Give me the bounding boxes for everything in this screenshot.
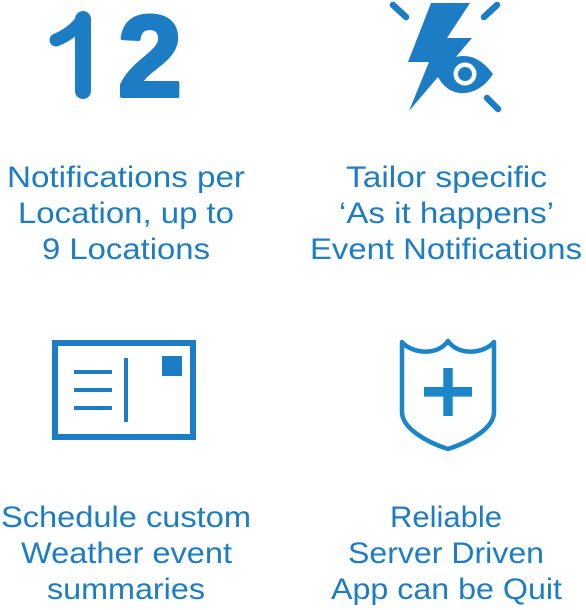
text: tailor event notifications: Event Notifications: [310, 233, 582, 266]
icon: postcard: [55, 343, 193, 437]
text: schedule summaries: summaries: [47, 573, 205, 606]
text: tailor event notifications: Tailor specific: [346, 161, 547, 194]
text: notifications per location: Location, up to: [18, 197, 234, 230]
text: schedule summaries: Schedule custom: [1, 501, 251, 534]
text: reliable server driven: Server Driven: [348, 537, 544, 570]
icon: shield with plus: [402, 341, 494, 449]
text: notifications per location: Notifications per: [7, 161, 245, 194]
text: notifications per location: 9 Locations: [42, 233, 210, 266]
text: reliable server driven: Reliable: [390, 501, 502, 534]
text: reliable server driven: [331, 501, 563, 606]
text: schedule summaries: Weather event: [21, 537, 233, 570]
text: notifications per location: [7, 161, 245, 266]
text: tailor event notifications: ‘As it happens’: [339, 197, 554, 230]
text: tailor event notifications: [310, 161, 582, 266]
text: schedule summaries: [1, 501, 251, 606]
text: reliable server driven: App can be Quit: [331, 573, 563, 606]
icon: lightning bolt with eye: [393, 3, 498, 111]
